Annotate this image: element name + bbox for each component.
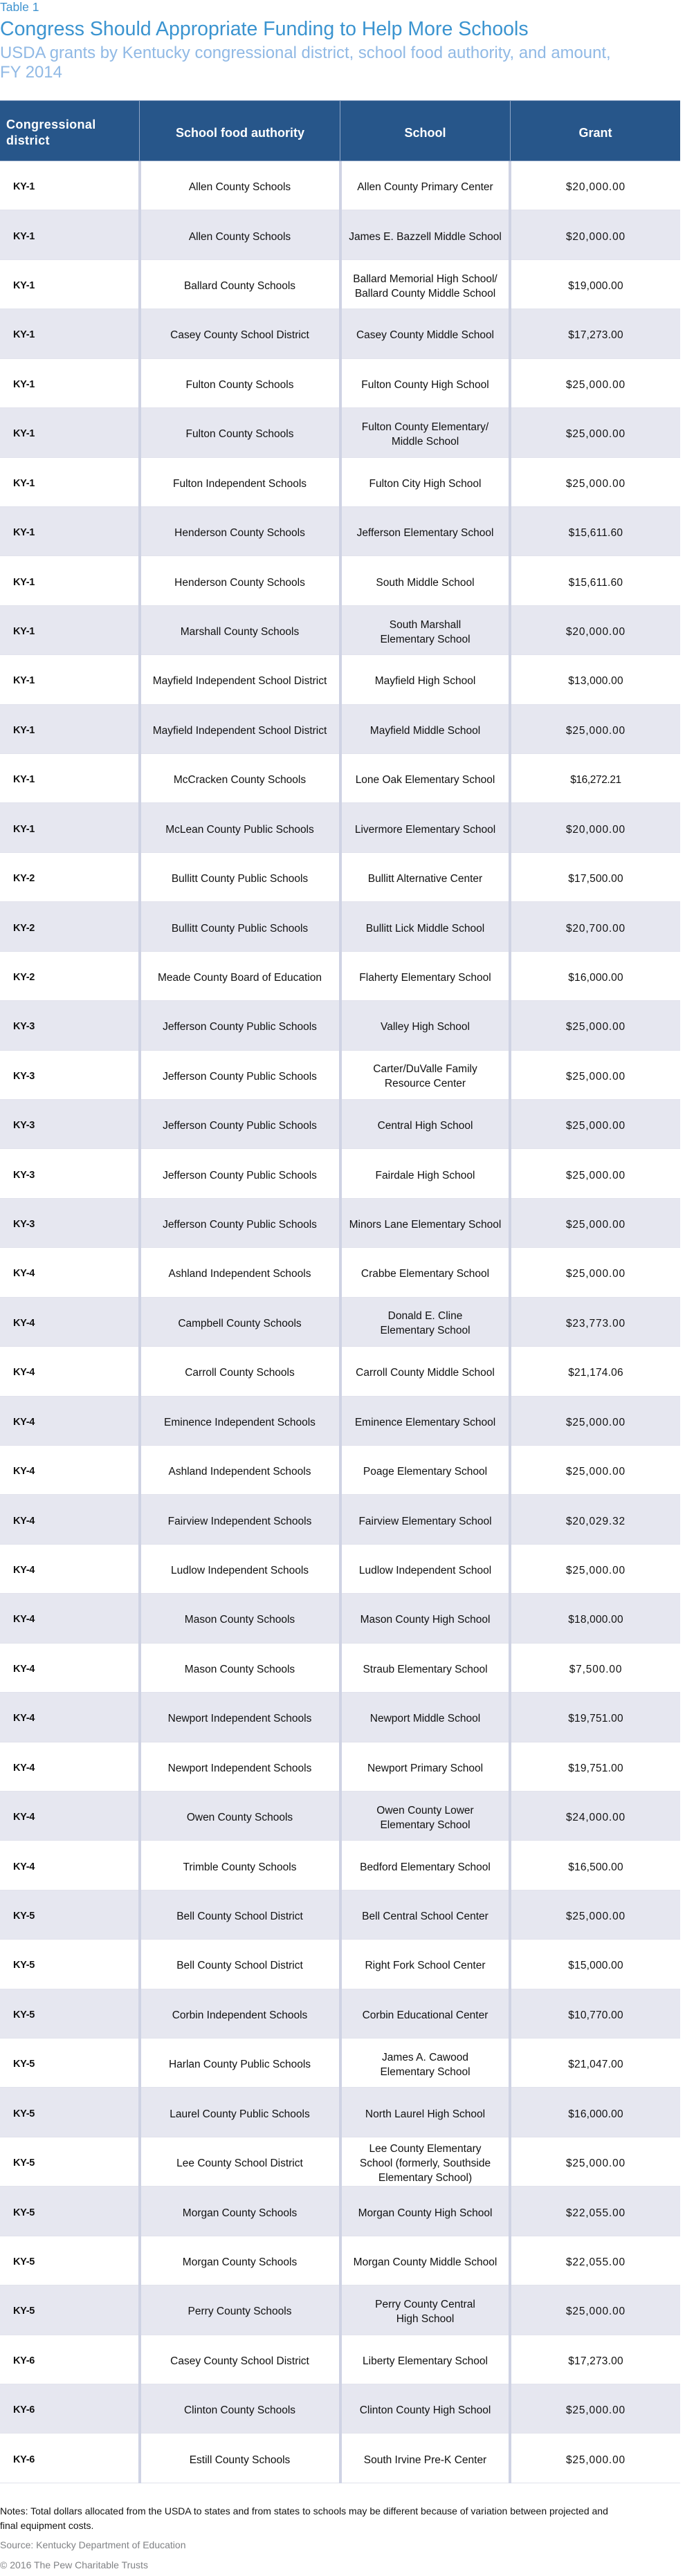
row: Mason County High School: $18,000.00 (568, 1614, 623, 1626)
row: South Irvine Pre-K Center (0, 2434, 680, 2483)
row: Bell Central School Center: KY-5 (13, 1911, 35, 1922)
table header row: School (404, 126, 446, 140)
row: Bedford Elementary School: $16,500.00 (568, 1861, 623, 1873)
row: Bullitt Lick Middle School: KY-2 (13, 923, 35, 934)
row: Ludlow Independent School: Ludlow Independent Schools (171, 1565, 309, 1576)
row: Fulton City High School: $25,000.00 (566, 478, 625, 490)
row: Ludlow Independent School: KY-4 (13, 1565, 35, 1576)
row: Clinton County High School: Clinton County Schools (184, 2404, 295, 2416)
row: Newport Middle School: KY-4 (13, 1713, 35, 1724)
row: Minors Lane Elementary School: $25,000.00 (566, 1219, 625, 1231)
row: Casey County Middle School: $17,273.00 (568, 329, 623, 341)
row: Carroll County Middle School: $21,174.06 (568, 1367, 623, 1379)
row: Mayfield High School: Mayfield Independent School District (153, 675, 327, 687)
row: Straub Elementary School: Straub Elementary School (363, 1664, 488, 1675)
row: South Marshall Elementary (0, 606, 680, 655)
row: Ballard Memorial: Ballard County Middle School (355, 288, 495, 300)
row: Central High School: Central High School (378, 1120, 473, 1132)
row: James A. Cawood Elementary: KY-5 (13, 2059, 35, 2070)
row: Newport Middle School: Newport Middle School (370, 1713, 480, 1724)
row: South Irvine Pre-K Center: South Irvine Pre-K Center (364, 2454, 486, 2466)
row: Mayfield Middle School (0, 705, 680, 754)
row: Minors Lane Elementary School: Minors Lane Elementary School (349, 1219, 501, 1231)
row: Newport Middle School: Newport Independent Schools (168, 1713, 311, 1724)
row: Fulton County Elementary: Fulton County Schools (186, 428, 293, 440)
row: Fairdale High School: Jefferson County Public Schools (163, 1170, 317, 1181)
row: Livermore Elementary School: McLean County Public Schools (165, 824, 314, 836)
row: Lee County Elementary: Elementary School) (378, 2172, 472, 2184)
row: James A. Cawood Elementary: Harlan County Public Schools (169, 2059, 311, 2070)
row: Corbin Educational Center: KY-5 (13, 2009, 35, 2021)
row: Carter/DuValle: Carter/DuValle Family (373, 1063, 477, 1075)
row: Bullitt Lick Middle School: $20,700.00 (566, 923, 625, 935)
row: Right Fork School Center: $15,000.00 (568, 1960, 623, 1971)
row: Poage Elementary School: KY-4 (13, 1466, 35, 1477)
row: Bell Central School Center (0, 1890, 680, 1940)
row: Owen County Lower Elementary: $24,000.00 (566, 1812, 625, 1823)
row: South Irvine Pre-K Center: $25,000.00 (566, 2454, 625, 2466)
row: Ballard Memorial (0, 260, 680, 309)
row: Bullitt Lick Middle School: Bullitt Lick Middle School (366, 923, 484, 935)
row: Bullitt Alternative Center: Bullitt Alternative Center (368, 873, 482, 885)
row: Jefferson Elementary School: Henderson County Schools (174, 527, 305, 539)
row: Central High School: Jefferson County Public Schools (163, 1120, 317, 1132)
row: Corbin Educational Center: Corbin Independent Schools (172, 2009, 307, 2021)
row: Perry County Central High School (0, 2285, 680, 2335)
row: Bedford Elementary School (0, 1841, 680, 1890)
row: Livermore Elementary School: $20,000.00 (566, 824, 625, 836)
row: Valley High School: KY-3 (13, 1021, 35, 1032)
row: Ludlow Independent School: $25,000.00 (566, 1565, 625, 1576)
table header row: district (6, 134, 50, 147)
row: Central High School: $25,000.00 (566, 1120, 625, 1132)
row: Bullitt Alternative Center: $17,500.00 (568, 873, 623, 885)
row: Mason County High School: Mason County High School (360, 1614, 490, 1626)
row: Perry County Central High School: Perry County Central (375, 2299, 475, 2310)
row: Mayfield High School: $13,000.00 (568, 675, 623, 687)
row: Perry County Central High School: KY-5 (13, 2306, 35, 2317)
row: Fulton City High School (0, 458, 680, 507)
row: South Middle School: Henderson County Schools (174, 577, 305, 589)
row: James E. Bazzell Middle School (0, 210, 680, 260)
row: Flaherty Elementary School: $16,000.00 (568, 972, 623, 984)
row: Fulton County High School: $25,000.00 (566, 379, 625, 391)
row: Eminence Elementary School: Eminence Independent Schools (164, 1417, 316, 1428)
row: Lee County Elementary: School (formerly, Southside (360, 2158, 491, 2169)
row: Bedford Elementary School: KY-4 (13, 1861, 35, 1873)
table header row: School food authority (176, 126, 304, 140)
row: Ballard Memorial: Ballard Memorial High School/ (353, 273, 497, 285)
row: Newport Primary School: Newport Primary School (367, 1763, 483, 1774)
row: Bullitt Alternative Center (0, 853, 680, 902)
row: Bullitt Alternative Center: KY-2 (13, 873, 35, 884)
row: Lone Oak Elementary School (0, 754, 680, 803)
row: Lee County Elementary: KY-5 (13, 2158, 35, 2169)
row: Corbin Educational Center: Corbin Educational Center (363, 2009, 488, 2021)
title: Congress Should Appropriate Funding to Help More Schools (0, 18, 529, 40)
row: Crabbe Elementary School: KY-4 (13, 1268, 35, 1279)
row: Mason County High School: KY-4 (13, 1614, 35, 1625)
row: North Laurel High School: North Laurel High School (365, 2108, 485, 2120)
row: North Laurel High School: $16,000.00 (568, 2108, 623, 2120)
row: Morgan County High School (0, 2187, 680, 2236)
row: Clinton County High School: Clinton County High School (360, 2404, 491, 2416)
row: Newport Primary School: $19,751.00 (568, 1763, 623, 1774)
row: Fulton County High School: Fulton County High School (361, 379, 489, 391)
row: Morgan County High School: KY-5 (13, 2207, 35, 2218)
row: Morgan County High School: Morgan County High School (358, 2207, 492, 2219)
row: Straub Elementary School: $7,500.00 (569, 1664, 622, 1675)
row: Lee County Elementary (0, 2137, 680, 2187)
row: Newport Primary School: Newport Independent Schools (168, 1763, 311, 1774)
row: James E. Bazzell Middle School: Allen County Schools (189, 231, 291, 243)
row: Carroll County Middle School: Carroll County Middle School (356, 1367, 495, 1379)
row: Owen County Lower Elementary (0, 1792, 680, 1841)
row: Morgan County Middle School: $22,055.00 (566, 2256, 625, 2268)
row: Mason County High School (0, 1594, 680, 1644)
row: Poage Elementary School: Poage Elementary School (363, 1466, 487, 1478)
row: Allen County Primary Center: $20,000.00 (566, 181, 625, 193)
row: Fulton City High School: Fulton City High School (369, 478, 481, 490)
table header row: Grant (578, 126, 612, 140)
notes: final equipment costs. (0, 2520, 93, 2531)
row: Lone Oak Elementary School: McCracken County Schools (174, 774, 306, 786)
row: Carter/DuValle: $25,000.00 (566, 1071, 625, 1083)
row: Jefferson Elementary School: KY-1 (13, 527, 35, 538)
row: Newport Middle School: $19,751.00 (568, 1713, 623, 1724)
row: Morgan County Middle School: KY-5 (13, 2256, 35, 2267)
row: Poage Elementary School: Ashland Independent Schools (169, 1466, 311, 1478)
row: Ludlow Independent School (0, 1545, 680, 1594)
row: Poage Elementary School (0, 1446, 680, 1495)
row: Carroll County Middle School (0, 1347, 680, 1397)
row: James A. Cawood Elementary: Elementary School (380, 2066, 471, 2078)
row: Carter/DuValle: KY-3 (13, 1071, 35, 1082)
table header row (0, 100, 680, 161)
row: Morgan County High School: $22,055.00 (566, 2207, 625, 2219)
row: Eminence Elementary School: KY-4 (13, 1417, 35, 1428)
row: Fulton City High School: Fulton Independent Schools (173, 478, 307, 490)
subtitle: USDA grants by Kentucky congressional district, school food authority, and amount, (0, 44, 611, 62)
row: South Middle School: $15,611.60 (569, 577, 623, 589)
row: Fulton County High School (0, 359, 680, 408)
row: Central High School: KY-3 (13, 1120, 35, 1131)
row: Flaherty Elementary School: Flaherty Elementary School (359, 972, 491, 984)
row: Casey County Middle School: KY-1 (13, 329, 35, 340)
row: Fairview Elementary School: Fairview Independent Schools (168, 1516, 311, 1527)
row: Bedford Elementary School: Bedford Elementary School (360, 1861, 491, 1873)
row: Crabbe Elementary School: Ashland Independent Schools (169, 1268, 311, 1280)
row: Livermore Elementary School: KY-1 (13, 824, 35, 835)
row: Fulton County Elementary: Fulton County Elementary/ (362, 421, 488, 433)
row: Right Fork School Center (0, 1940, 680, 1989)
table label: Table 1 (0, 0, 39, 14)
row: Mason County High School: Mason County Schools (185, 1614, 295, 1626)
row: Fulton County High School: Fulton County Schools (186, 379, 293, 391)
row: Owen County Lower Elementary: Elementary School (380, 1819, 471, 1831)
row: Newport Middle School (0, 1693, 680, 1742)
row: Valley High School: Jefferson County Public Schools (163, 1021, 317, 1033)
row: Crabbe Elementary School (0, 1248, 680, 1298)
row: Corbin Educational Center (0, 1989, 680, 2039)
notes (0, 2505, 608, 2531)
row: Valley High School: Valley High School (381, 1021, 470, 1033)
row: South Middle School: KY-1 (13, 577, 35, 588)
row: Allen County Primary Center: Allen County Schools (189, 181, 291, 193)
row: Liberty Elementary School: KY-6 (13, 2355, 35, 2366)
row: South Marshall Elementary: $20,000.00 (566, 626, 625, 638)
row: Perry County Central High School: Perry County Schools (188, 2306, 291, 2317)
row: Bell Central School Center: Bell County School District (176, 1911, 303, 1922)
row: Right Fork School Center: KY-5 (13, 1960, 35, 1971)
row: Fulton County Elementary (0, 408, 680, 458)
row: Mayfield High School (0, 655, 680, 705)
row: South Marshall Elementary: Elementary School (380, 634, 471, 645)
row: Liberty Elementary School: Liberty Elementary School (363, 2355, 488, 2367)
row: James A. Cawood Elementary (0, 2039, 680, 2088)
row: Fulton County High School: KY-1 (13, 379, 35, 390)
row: Donald E. Cline Elementary: Elementary School (380, 1325, 471, 1336)
row: Liberty Elementary School (0, 2335, 680, 2384)
row: Ballard Memorial: KY-1 (13, 280, 35, 291)
row: Ludlow Independent School: Ludlow Independent School (359, 1565, 491, 1576)
row: Carter/DuValle: Resource Center (385, 1078, 466, 1089)
row: Donald E. Cline Elementary: $23,773.00 (566, 1318, 625, 1330)
row: Ballard Memorial: Ballard County Schools (184, 280, 295, 292)
row: North Laurel High School: Laurel County Public Schools (170, 2108, 310, 2120)
row: James E. Bazzell Middle School: $20,000.00 (566, 231, 625, 243)
row: Mayfield Middle School: $25,000.00 (566, 725, 625, 737)
row: Fulton City High School: KY-1 (13, 478, 35, 489)
row: Mayfield Middle School: Mayfield Independent School District (153, 725, 327, 737)
row: Carter/DuValle: Jefferson County Public Schools (163, 1071, 317, 1083)
row: Valley High School: $25,000.00 (566, 1021, 625, 1033)
row: Newport Primary School (0, 1742, 680, 1792)
row: Minors Lane Elementary School: KY-3 (13, 1219, 35, 1230)
row: Jefferson Elementary School (0, 507, 680, 556)
row: James E. Bazzell Middle School: James E. Bazzell Middle School (349, 231, 502, 243)
row: Donald E. Cline Elementary: KY-4 (13, 1318, 35, 1329)
row: Casey County Middle School: Casey County School District (170, 329, 309, 341)
row: Lee County Elementary: Lee County Elementary (369, 2143, 481, 2155)
row: South Middle School (0, 556, 680, 606)
row: Eminence Elementary School (0, 1397, 680, 1446)
row: North Laurel High School: KY-5 (13, 2108, 35, 2119)
row: Lone Oak Elementary School: $16,272.21 (570, 774, 621, 786)
row: Bullitt Lick Middle School (0, 902, 680, 952)
row: Flaherty Elementary School (0, 952, 680, 1001)
row: Jefferson Elementary School: Jefferson Elementary School (357, 527, 493, 539)
table header row: Congressional (6, 118, 96, 131)
row: Mayfield Middle School: Mayfield Middle School (370, 725, 480, 737)
row: Flaherty Elementary School: Meade County Board of Education (158, 972, 322, 984)
row: Fairview Elementary School (0, 1495, 680, 1545)
row: Owen County Lower Elementary: Owen County Schools (187, 1812, 293, 1823)
row: Fulton County Elementary: KY-1 (13, 428, 35, 439)
row: Ballard Memorial: $19,000.00 (568, 280, 623, 292)
row: North Laurel High School (0, 2088, 680, 2137)
row: South Marshall Elementary: South Marshall (390, 618, 461, 631)
row: Crabbe Elementary School: $25,000.00 (566, 1268, 625, 1280)
row: Livermore Elementary School: Livermore Elementary School (355, 824, 495, 836)
row: Morgan County Middle School: Morgan County Middle School (354, 2256, 497, 2268)
row: Liberty Elementary School: $17,273.00 (568, 2355, 623, 2367)
row: Crabbe Elementary School: Crabbe Elementary School (361, 1268, 489, 1280)
row: Liberty Elementary School: Casey County School District (170, 2355, 309, 2367)
row: Minors Lane Elementary School: Jefferson County Public Schools (163, 1219, 317, 1231)
row: Donald E. Cline Elementary: Donald E. Cline (388, 1310, 462, 1322)
row: Lee County Elementary: Lee County School District (176, 2158, 303, 2169)
row: Allen County Primary Center: KY-1 (13, 181, 35, 192)
row: Eminence Elementary School: $25,000.00 (566, 1417, 625, 1428)
row: Carroll County Middle School: KY-4 (13, 1367, 35, 1378)
row: Mayfield Middle School: KY-1 (13, 725, 35, 736)
row: Fairdale High School (0, 1149, 680, 1199)
row: Morgan County Middle School: Morgan County Schools (183, 2256, 297, 2268)
copyright: © 2016 The Pew Charitable Trusts (0, 2559, 148, 2570)
row: Bullitt Alternative Center: Bullitt County Public Schools (172, 873, 308, 885)
row: Right Fork School Center: Bell County School District (176, 1960, 303, 1971)
row: James E. Bazzell Middle School: KY-1 (13, 231, 35, 242)
row: Fairview Elementary School: KY-4 (13, 1516, 35, 1527)
row: Fairdale High School: KY-3 (13, 1170, 35, 1181)
row: Livermore Elementary School (0, 803, 680, 853)
row: South Irvine Pre-K Center: Estill County Schools (190, 2454, 290, 2466)
row: Allen County Primary Center: Allen County Primary Center (357, 181, 493, 193)
row: South Marshall Elementary: Marshall County Schools (181, 626, 299, 638)
row: Perry County Central High School: High School (396, 2313, 454, 2325)
row: Eminence Elementary School: Eminence Elementary School (355, 1417, 495, 1428)
row: Clinton County High School: $25,000.00 (566, 2404, 625, 2416)
row: Bullitt Lick Middle School: Bullitt County Public Schools (172, 923, 308, 935)
row: Straub Elementary School: KY-4 (13, 1664, 35, 1675)
row: Fairview Elementary School: Fairview Elementary School (358, 1516, 492, 1527)
row: Bell Central School Center: Bell Central School Center (362, 1911, 488, 1922)
row: Lone Oak Elementary School: KY-1 (13, 774, 35, 785)
row: Lee County Elementary: $25,000.00 (566, 2158, 625, 2169)
row: Bell Central School Center: $25,000.00 (566, 1911, 625, 1922)
notes: Notes: Total dollars allocated from the USDA to states and from states to schools may be different because of variation between projected and (0, 2505, 608, 2517)
row: Clinton County High School: KY-6 (13, 2404, 35, 2416)
row: James A. Cawood Elementary: $21,047.00 (568, 2059, 623, 2070)
row: Perry County Central High School: $25,000.00 (566, 2306, 625, 2317)
row: Morgan County Middle School (0, 2236, 680, 2285)
row: South Irvine Pre-K Center: KY-6 (13, 2454, 35, 2465)
row: Fairview Elementary School: $20,029.32 (566, 1516, 625, 1527)
row: Straub Elementary School: Mason County Schools (185, 1664, 295, 1675)
row: Mayfield High School: KY-1 (13, 675, 35, 686)
source: Source: Kentucky Department of Education (0, 2539, 185, 2550)
row: Carter/DuValle (0, 1051, 680, 1100)
row: James A. Cawood Elementary: James A. Cawood (382, 2052, 468, 2063)
row: Donald E. Cline Elementary (0, 1298, 680, 1347)
row: Allen County Primary Center (0, 161, 680, 210)
subtitle: FY 2014 (0, 63, 62, 82)
row: Casey County Middle School: Casey County Middle School (356, 329, 494, 341)
row: Flaherty Elementary School: KY-2 (13, 972, 35, 983)
row: South Marshall Elementary: KY-1 (13, 626, 35, 637)
row: Fulton County Elementary: Middle School (392, 436, 459, 448)
row: Fulton County Elementary: $25,000.00 (566, 428, 625, 440)
row: Minors Lane Elementary School (0, 1199, 680, 1248)
row: Morgan County High School: Morgan County Schools (183, 2207, 297, 2219)
row: Central High School (0, 1100, 680, 1149)
row: Casey County Middle School (0, 309, 680, 359)
row: Donald E. Cline Elementary: Campbell County Schools (178, 1318, 302, 1330)
row: Lone Oak Elementary School: Lone Oak Elementary School (356, 774, 495, 786)
row: Poage Elementary School: $25,000.00 (566, 1466, 625, 1478)
row: Owen County Lower Elementary: KY-4 (13, 1812, 35, 1823)
row: South Middle School: South Middle School (376, 577, 475, 589)
row: Carroll County Middle School: Carroll County Schools (185, 1367, 295, 1379)
subtitle (0, 44, 611, 82)
row: Fairdale High School: Fairdale High School (376, 1170, 475, 1181)
row: Owen County Lower Elementary: Owen County Lower (376, 1805, 474, 1816)
row: Fairdale High School: $25,000.00 (566, 1170, 625, 1181)
row: Bedford Elementary School: Trimble County Schools (183, 1861, 296, 1873)
row: Newport Primary School: KY-4 (13, 1763, 35, 1774)
row: Valley High School (0, 1001, 680, 1051)
row: Clinton County High School (0, 2384, 680, 2434)
row: Straub Elementary School (0, 1644, 680, 1693)
row: Right Fork School Center: Right Fork School Center (365, 1960, 486, 1971)
row: Jefferson Elementary School: $15,611.60 (569, 527, 623, 539)
row: Mayfield High School: Mayfield High School (375, 675, 475, 687)
row: Corbin Educational Center: $10,770.00 (568, 2009, 623, 2021)
